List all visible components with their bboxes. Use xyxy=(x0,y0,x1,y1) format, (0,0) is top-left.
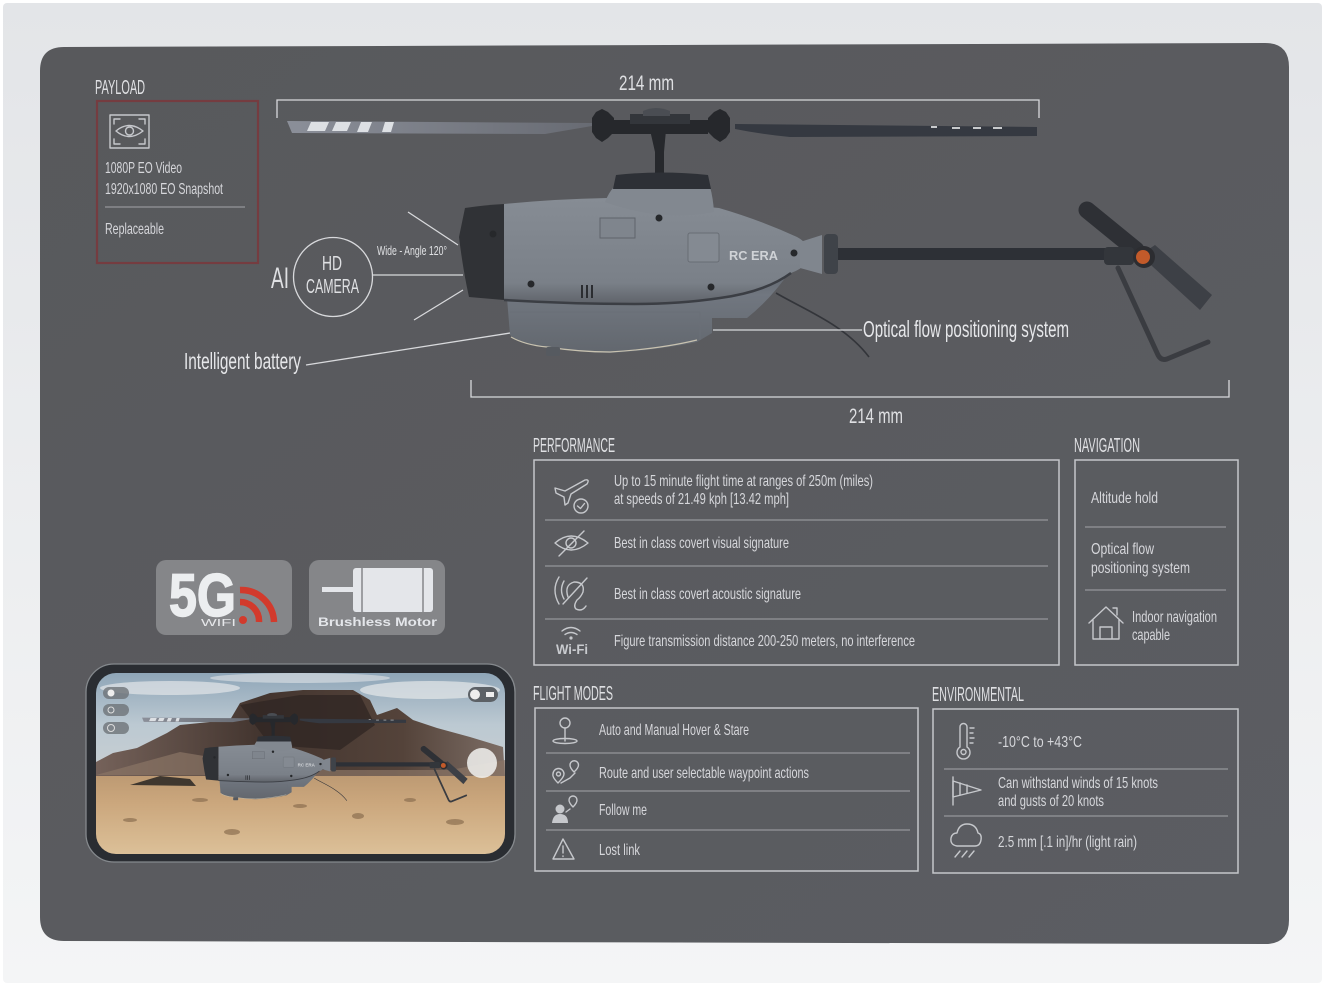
badge: 5G WiFi: WIFI xyxy=(201,617,236,629)
callout: HD camera: AI xyxy=(271,262,289,295)
text: flight time: Up to 15 minute flight time at ranges of 250m (miles) xyxy=(614,473,873,490)
text: wind: Can withstand winds of 15 knots xyxy=(998,775,1158,792)
camera nose xyxy=(459,204,504,300)
text: flight time: at speeds of 21.49 kph [13.42 mph] xyxy=(614,491,789,508)
text: flight time xyxy=(614,473,873,508)
text: optical flow xyxy=(1091,541,1190,577)
text: altitude hold: Altitude hold xyxy=(1091,490,1158,507)
heading: payload: PAYLOAD xyxy=(95,77,145,99)
text: visual signature: Best in class covert visual signature xyxy=(614,535,789,552)
panel: environmental xyxy=(932,684,1238,873)
text: lost link: Lost link xyxy=(599,842,641,859)
tail skid xyxy=(1118,268,1208,360)
mast cowl xyxy=(605,172,714,215)
icon: warning xyxy=(553,839,574,859)
antenna xyxy=(776,293,869,357)
payload specs text xyxy=(105,160,245,238)
panel: navigation xyxy=(1074,435,1238,665)
navigation frame xyxy=(1075,460,1238,665)
icon: plane check xyxy=(555,480,588,513)
icon: windsock xyxy=(953,777,981,805)
text: indoor navigation: Indoor navigation xyxy=(1132,609,1217,626)
text: optical flow: positioning system xyxy=(1091,560,1190,577)
text: wind xyxy=(998,775,1158,810)
dimension: rotor width: 214 mm xyxy=(619,72,674,95)
body details xyxy=(490,214,798,304)
icon: route xyxy=(553,761,578,783)
callout: HD camera: CAMERA xyxy=(306,276,359,298)
panel: flight modes xyxy=(533,683,918,871)
upper body xyxy=(504,198,808,304)
environmental frame xyxy=(933,709,1238,873)
icon: eye crossed xyxy=(555,531,588,556)
dimension: rotor width xyxy=(277,72,1039,118)
text: indoor navigation: capable xyxy=(1132,627,1170,644)
performance frame xyxy=(534,460,1059,665)
icon: ear crossed xyxy=(555,577,587,610)
text: optical flow: Optical flow xyxy=(1091,541,1154,558)
tail collar xyxy=(800,234,838,274)
tail boom xyxy=(835,248,1115,260)
payload specs text: Replaceable xyxy=(105,221,164,238)
helicopter xyxy=(287,108,1212,360)
icon: hover pin xyxy=(553,718,577,744)
tail rotor xyxy=(1087,210,1212,310)
text: wind: and gusts of 20 knots xyxy=(998,793,1104,810)
badge: 5G WiFi: 5G xyxy=(169,562,236,629)
helicopter in scene xyxy=(142,713,468,802)
callout: intelligent battery: Intelligent battery xyxy=(184,348,301,374)
badge: brushless motor xyxy=(309,560,445,635)
text: follow me: Follow me xyxy=(599,802,647,819)
app UI buttons xyxy=(103,687,498,778)
main rotor blades xyxy=(287,121,1037,137)
phone app screenshot xyxy=(86,664,515,862)
text: rain: 2.5 mm [.1 in]/hr (light rain) xyxy=(998,834,1137,851)
badge: brushless motor: Brushless Motor xyxy=(318,615,437,629)
heading: navigation: NAVIGATION xyxy=(1074,435,1140,457)
callout: HD camera: Wide - Angle 120° xyxy=(377,244,447,258)
text: temperature: -10°C to +43°C xyxy=(998,734,1082,751)
panel: payload xyxy=(95,77,258,263)
heading: flight modes: FLIGHT MODES xyxy=(533,683,613,705)
callout: intelligent battery xyxy=(184,333,510,374)
heading: environmental: ENVIRONMENTAL xyxy=(932,684,1024,706)
payload red frame xyxy=(97,101,258,263)
payload specs text: 1920x1080 EO Snapshot xyxy=(105,181,223,198)
body details: RC ERA xyxy=(729,248,779,263)
icon: house xyxy=(1089,607,1123,639)
callout: HD camera: HD xyxy=(322,253,342,275)
icon: camera eye xyxy=(110,115,149,148)
icon: Wi-Fi xyxy=(556,628,588,657)
desert scene xyxy=(96,673,505,854)
text: indoor navigation xyxy=(1132,609,1217,644)
callout: HD camera xyxy=(271,212,463,320)
icon: rain cloud xyxy=(951,824,981,857)
panel: performance xyxy=(533,435,1059,665)
text: hover: Auto and Manual Hover & Stare xyxy=(599,722,749,739)
icon: person follow xyxy=(552,796,577,823)
flight modes frame xyxy=(535,708,918,871)
text: acoustic signature: Best in class covert acoustic signature xyxy=(614,586,801,603)
callout: optical flow: Optical flow positioning system xyxy=(863,316,1069,342)
heading: performance: PERFORMANCE xyxy=(533,435,615,457)
icon: Wi-Fi: Wi-Fi xyxy=(556,642,588,657)
dimension: body length: 214 mm xyxy=(849,405,903,428)
rotor head xyxy=(592,108,730,174)
dimension: body length xyxy=(471,380,1229,428)
text: route: Route and user selectable waypoint actions xyxy=(599,765,809,782)
payload specs text: 1080P EO Video xyxy=(105,160,182,177)
lower fuselage xyxy=(507,270,791,353)
badge: 5G WiFi xyxy=(156,560,292,635)
icon: thermometer xyxy=(957,724,974,759)
text: transmission: Figure transmission distance 200-250 meters, no interference xyxy=(614,633,915,650)
